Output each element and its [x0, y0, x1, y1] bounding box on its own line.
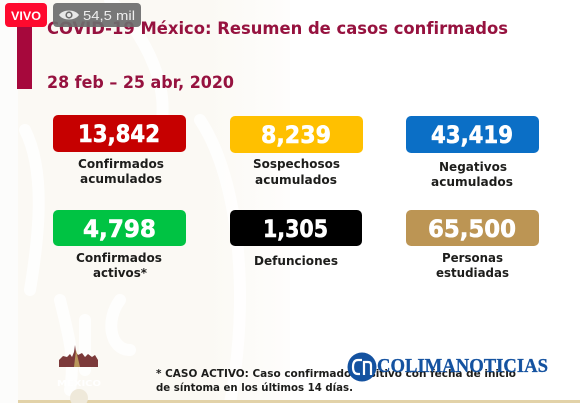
logo: gobierno de México: MÉXICO	[57, 377, 101, 388]
stat: negativos acumulados: acumulados	[431, 174, 513, 189]
stat: confirmados acumulados: 13,842	[78, 120, 160, 148]
stat: defunciones	[230, 210, 362, 268]
live badge	[5, 3, 47, 27]
icon: Colimanoticias circle	[348, 352, 376, 382]
stat: sospechosos acumulados: 8,239	[261, 121, 331, 149]
logo: gobierno de México	[57, 345, 101, 403]
stat: personas estudiadas	[406, 210, 539, 280]
accent bar	[17, 25, 32, 89]
stat: negativos acumulados: 43,419	[431, 121, 513, 149]
date range: 28 feb – 25 abr, 2020	[47, 73, 234, 93]
stat: personas estudiadas: 65,500	[428, 215, 516, 243]
stat: negativos acumulados: Negativos	[439, 159, 507, 174]
stat: negativos acumulados	[406, 116, 539, 189]
footnote	[156, 368, 516, 394]
icon: eye	[59, 10, 79, 20]
stat: sospechosos acumulados: acumulados	[255, 172, 337, 187]
viewer count badge: 54,5 mil	[83, 8, 135, 23]
stat: confirmados activos: 4,798	[83, 215, 156, 243]
stat: confirmados acumulados: Confirmados	[78, 156, 164, 171]
stat: confirmados activos: activos*	[93, 265, 147, 280]
stat: personas estudiadas: Personas	[442, 250, 503, 265]
stat: sospechosos acumulados: Sospechosos	[253, 156, 340, 171]
watermark: Colimanoticias: COLIMANOTICIAS	[377, 355, 548, 377]
viewer count badge	[53, 3, 141, 27]
stat: defunciones: 1,305	[263, 215, 328, 243]
stat: confirmados acumulados	[53, 115, 186, 186]
title: COVID-19 México: Resumen de casos confirmados	[47, 19, 508, 39]
stat: confirmados activos	[53, 210, 186, 280]
footnote: * CASO ACTIVO: Caso confirmado positivo con fecha de inicio	[156, 368, 516, 380]
stat: sospechosos acumulados	[230, 116, 363, 187]
stat: defunciones: Defunciones	[254, 253, 338, 268]
stat: confirmados activos: Confirmados	[76, 250, 162, 265]
stat: personas estudiadas: estudiadas	[436, 265, 509, 280]
watermark: Colimanoticias	[348, 352, 548, 382]
stat: confirmados acumulados: acumulados	[80, 171, 162, 186]
live badge: VIVO	[11, 9, 41, 23]
footnote: de síntoma en los últimos 14 días.	[156, 382, 353, 394]
